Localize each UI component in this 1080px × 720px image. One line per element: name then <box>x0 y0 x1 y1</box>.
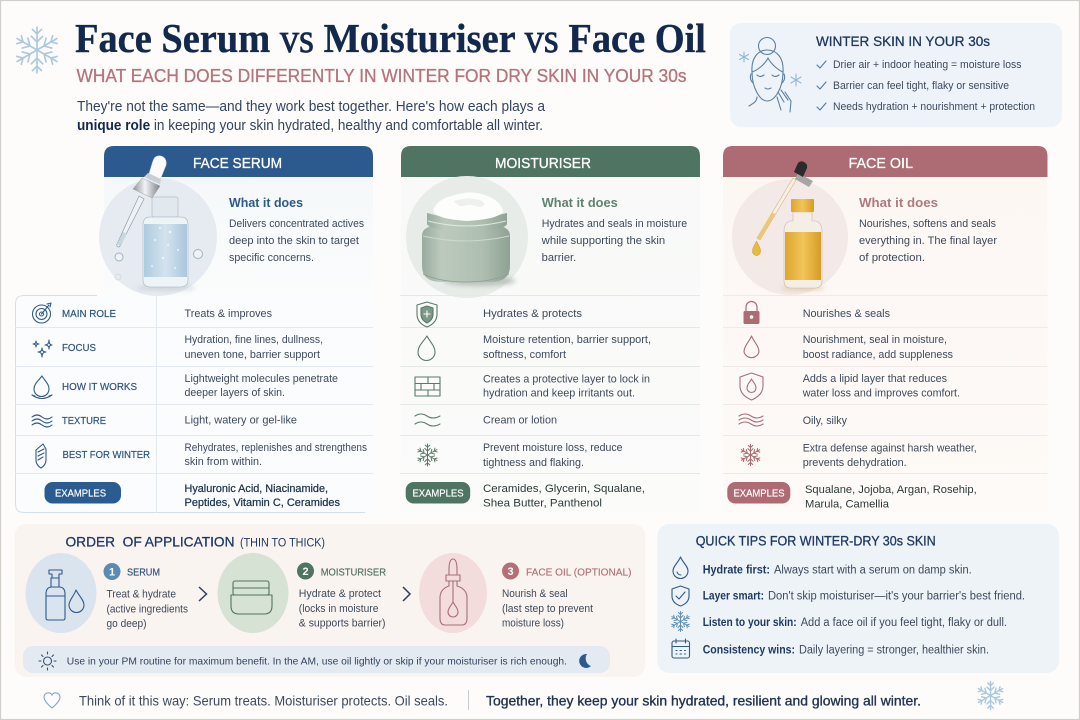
step 3: face oil: Nourish & seal <box>502 588 568 600</box>
step 1: serum: (active ingredients <box>106 604 188 616</box>
checklist: Drier air + indoor heating = moisture loss <box>833 59 1022 71</box>
icon: snowflake <box>417 444 438 466</box>
serum table rows: Light, watery or gel-like <box>184 414 297 426</box>
moisturiser table rows: hydration and keep irritants out. <box>483 388 635 400</box>
tip: listen to your skin: Listen to your skin: <box>703 617 797 629</box>
tip: hydrate first: Hydrate first: <box>703 564 770 576</box>
face oil table rows: Adds a lipid layer that reduces <box>803 373 947 385</box>
tip: listen to your skin: Add a face oil if you feel tight, flaky or dull. <box>801 617 1007 629</box>
illustration: oil bottle <box>732 161 848 295</box>
moisturiser examples pill: EXAMPLES <box>412 488 464 500</box>
intro text: They're not the same—and they work best together. Here's how each plays a <box>77 98 546 115</box>
serum table rows: skin from within. <box>184 456 262 468</box>
moisturiser table rows: Cream or lotion <box>483 414 557 426</box>
moisturiser table rows: Shea Butter, Panthenol <box>483 498 602 510</box>
moisturiser table rows: softness, comfort <box>483 349 566 361</box>
serum table rows: Lightweight molecules penetrate <box>184 373 338 385</box>
moisturiser table rows: Moisture retention, barrier support, <box>483 334 651 346</box>
checklist <box>817 59 1035 113</box>
step 2: moisturiser <box>218 553 386 633</box>
tip: consistency wins <box>672 639 989 658</box>
step 3: face oil: 3 <box>507 566 514 578</box>
moisturiser what it does: barrier. <box>542 252 576 264</box>
serum table rows: Peptides, Vitamin C, Ceramides <box>184 497 340 509</box>
face oil what it does: What it does <box>859 195 938 210</box>
serum table rows: BEST FOR WINTER <box>62 449 150 461</box>
serum table rows: Treats & improves <box>184 308 272 320</box>
moisturiser table rows: Creates a protective layer to lock in <box>483 374 650 386</box>
serum table rows: deeper layers of skin. <box>184 387 285 399</box>
step 3: face oil: FACE OIL (OPTIONAL) <box>526 566 632 578</box>
footer message: Together, they keep your skin hydrated, resilient and glowing all winter. <box>486 693 921 709</box>
step 1: serum: Treat & hydrate <box>106 588 176 600</box>
illustration: cream jar <box>406 176 528 298</box>
tip: hydrate first: Always start with a serum on damp skin. <box>774 564 972 576</box>
icon: moon <box>579 654 591 668</box>
moisturiser what it does: What it does <box>542 195 618 210</box>
step 1: serum: SERUM <box>127 566 160 578</box>
moisturiser what it does <box>541 195 687 264</box>
step 3: face oil: (last step to prevent <box>502 603 593 615</box>
serum examples pill <box>44 482 121 504</box>
icon: shield <box>417 302 437 327</box>
icon: oil drop <box>744 336 759 358</box>
note bar: Use in your PM routine for maximum benefit. In the AM, use oil lightly or skip if your moisturiser is rich enough. <box>67 656 567 668</box>
serum header: FACE SERUM <box>193 156 282 172</box>
icon: face with snowflakes <box>740 38 801 112</box>
serum table rows: MAIN ROLE <box>62 308 116 320</box>
icon: heart <box>44 693 60 708</box>
arrow: step 1 to 2 <box>199 587 206 601</box>
serum table rows: uneven tone, barrier support <box>184 349 320 361</box>
icon: drop <box>418 336 435 360</box>
face oil examples pill: EXAMPLES <box>734 488 784 500</box>
icon: drop on skin <box>32 376 52 398</box>
icon: cream waves <box>415 414 440 426</box>
icon: brick wall <box>415 377 440 396</box>
footer message: Think of it this way: Serum treats. Moisturiser protects. Oil seals. <box>79 693 448 709</box>
serum table rows <box>15 295 373 513</box>
moisturiser what it does: Hydrates and seals in moisture <box>542 218 687 230</box>
order heading: (THIN TO THICK) <box>240 538 325 550</box>
serum table rows: Rehydrates, replenishes and strengthens <box>184 442 367 454</box>
icon: padlock <box>744 302 760 324</box>
step 3: face oil: moisture loss) <box>502 618 564 630</box>
icon: sun <box>39 652 56 670</box>
panel: quick tips: QUICK TIPS FOR WINTER-DRY 30s SKIN <box>696 534 936 549</box>
footer message <box>44 690 921 710</box>
step 2: moisturiser: MOISTURISER <box>321 566 386 578</box>
face oil table rows: boost radiance, add suppleness <box>803 349 953 361</box>
serum what it does: specific concerns. <box>229 252 314 264</box>
moisturiser header <box>401 146 700 177</box>
panel: winter skin in your 30s: WINTER SKIN IN YOUR 30s <box>816 34 990 49</box>
step 1: serum: go deep) <box>106 618 146 630</box>
icon: target <box>32 303 51 323</box>
step 2: moisturiser: Hydrate & protect <box>299 588 381 600</box>
tip: hydrate first <box>673 557 972 579</box>
panel: quick tips <box>657 524 1059 673</box>
intro text: unique role in keeping your skin hydrated, healthy and comfortable all winter. <box>77 117 543 134</box>
step 3: face oil <box>419 553 632 633</box>
serum table rows: Hyaluronic Acid, Niacinamide, <box>184 483 328 495</box>
moisturiser header: MOISTURISER <box>495 156 591 172</box>
note bar <box>23 646 610 673</box>
step 1: serum <box>26 553 188 633</box>
step 1: serum: 1 <box>109 566 115 578</box>
arrow: step 2 to 3 <box>403 587 410 601</box>
serum what it does <box>229 195 364 264</box>
panel: winter skin in your 30s <box>730 23 1062 127</box>
icon: snowflake <box>740 444 761 466</box>
face oil table rows: Nourishment, seal in moisture, <box>803 334 947 346</box>
face oil table rows: Squalane, Jojoba, Argan, Rosehip, <box>805 484 977 496</box>
face oil what it does <box>859 195 997 264</box>
illustration: serum bottle <box>99 156 217 296</box>
face oil what it does: of protection. <box>859 252 925 264</box>
icon: shield drop <box>740 373 763 400</box>
step 2: moisturiser: (locks in moisture <box>299 603 378 615</box>
serum table frame <box>16 296 365 512</box>
serum header <box>104 146 373 177</box>
serum what it does: What it does <box>229 195 303 210</box>
icon: snowflake bottom right <box>977 682 1004 710</box>
icon: waves <box>32 415 52 427</box>
moisturiser table rows <box>400 296 700 510</box>
order heading <box>66 534 325 550</box>
step 2: moisturiser: 2 <box>302 566 309 578</box>
face oil table rows: water loss and improves comfort. <box>802 388 960 400</box>
title: Face Serum vs Moisturiser vs Face Oil <box>75 15 706 61</box>
face oil table rows: prevents dehydration. <box>803 457 907 469</box>
panel: moisturiser column <box>400 146 700 513</box>
face oil table rows: Oily, silky <box>803 415 847 427</box>
moisturiser table rows: Prevent moisture loss, reduce <box>483 442 622 454</box>
icon: shield hand <box>36 444 46 468</box>
face oil header <box>723 146 1048 177</box>
serum table rows: HOW IT WORKS <box>62 381 137 393</box>
serum what it does: Delivers concentrated actives <box>229 218 364 230</box>
moisturiser examples pill <box>406 482 470 504</box>
face oil table rows <box>723 296 1048 510</box>
face oil what it does: Nourishes, softens and seals <box>859 218 996 230</box>
serum table rows: FOCUS <box>62 342 96 354</box>
tip: layer smart: Don't skip moisturiser—it's your barrier's best friend. <box>768 590 1025 602</box>
step 2: moisturiser: & supports barrier) <box>299 618 386 630</box>
icon: sparkles <box>33 340 52 357</box>
panel: order of application <box>14 524 646 677</box>
serum what it does: deep into the skin to target <box>229 235 359 247</box>
moisturiser table rows: Hydrates & protects <box>483 308 583 320</box>
panel: face serum column <box>15 146 373 513</box>
panel: face oil column <box>723 146 1048 513</box>
subtitle: WHAT EACH DOES DIFFERENTLY IN WINTER FOR DRY SKIN IN YOUR 30s <box>76 65 686 86</box>
face oil table rows: Marula, Camellia <box>805 498 890 510</box>
face oil table rows: Nourishes & seals <box>803 308 890 320</box>
icon: waves <box>739 414 763 426</box>
moisturiser table rows: Ceramides, Glycerin, Squalane, <box>483 483 645 495</box>
serum examples pill: EXAMPLES <box>55 488 106 500</box>
checklist: Barrier can feel tight, flaky or sensitive <box>833 80 1009 92</box>
tip: consistency wins: Consistency wins: <box>703 644 795 656</box>
serum table rows: Hydration, fine lines, dullness, <box>184 334 323 346</box>
tip: listen to your skin <box>671 612 1007 632</box>
checklist: Needs hydration + nourishment + protection <box>833 101 1035 113</box>
tip: layer smart <box>672 586 1025 606</box>
moisturiser table rows: tightness and flaking. <box>483 457 584 469</box>
intro text <box>77 98 546 134</box>
face oil what it does: everything in. The final layer <box>859 235 997 247</box>
tip: layer smart: Layer smart: <box>703 590 764 602</box>
order heading: ORDER OF APPLICATION <box>66 534 234 550</box>
icon: snowflake top left <box>14 27 60 73</box>
face oil table rows: Extra defense against harsh weather, <box>803 442 977 454</box>
moisturiser what it does: while supporting the skin <box>541 235 665 247</box>
face oil header: FACE OIL <box>848 156 913 172</box>
face oil examples pill <box>727 482 790 504</box>
tip: consistency wins: Daily layering = stronger, healthier skin. <box>799 644 989 656</box>
serum table rows: TEXTURE <box>62 415 106 427</box>
